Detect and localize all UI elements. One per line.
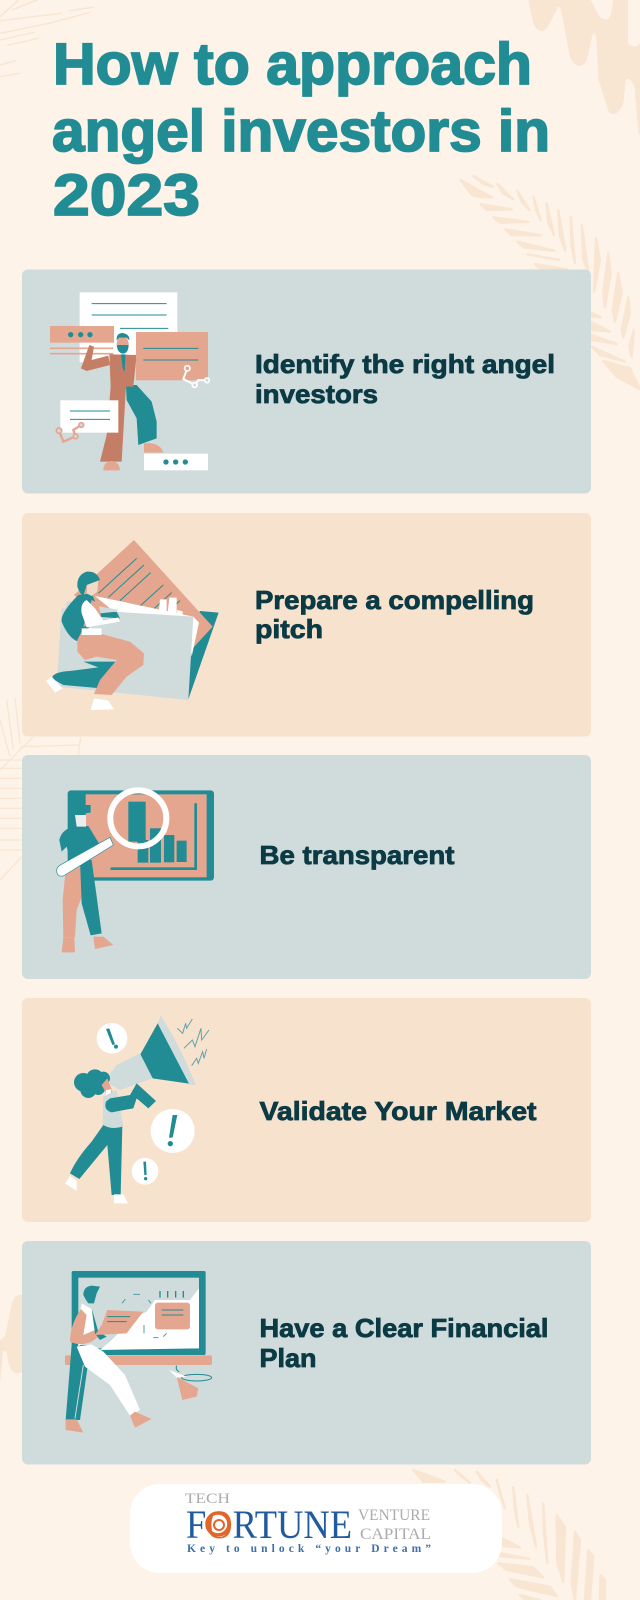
heading: Have a Clear Financial	[260, 1313, 548, 1343]
heading: Plan	[260, 1343, 316, 1373]
illustration: man with calendar board	[65, 1271, 212, 1433]
title: 2023	[53, 163, 200, 228]
logo text: venture capital: VENTURE	[358, 1507, 430, 1524]
heading: Identify the right angel	[255, 349, 555, 379]
heading	[255, 349, 555, 409]
title	[52, 32, 550, 228]
logo text: fortune: FORTUNE	[186, 1502, 352, 1547]
heading: Prepare a compelling	[255, 585, 534, 615]
illustration: woman with megaphone	[65, 1016, 209, 1203]
panel: prepare pitch	[22, 513, 591, 736]
heading: Validate Your Market	[260, 1096, 537, 1126]
illustration: magnifier and bar chart	[57, 790, 214, 952]
illustration: woman with folder	[46, 540, 219, 710]
logo panel	[130, 1484, 502, 1573]
panel: be transparent	[22, 755, 591, 979]
title: angel investors in	[52, 99, 550, 164]
heading: Be transparent	[260, 840, 455, 870]
heading: investors	[255, 379, 378, 409]
panel: identify investors	[22, 270, 591, 494]
title: How to approach	[53, 32, 532, 97]
panel: validate market	[22, 998, 591, 1222]
logo tagline: Key to unlock “your Dream”	[187, 1543, 431, 1555]
heading: pitch	[255, 614, 323, 644]
illustration: man with documents	[50, 292, 209, 470]
heading	[255, 585, 534, 644]
logo text: venture capital	[358, 1507, 431, 1543]
logo text: venture capital: CAPITAL	[360, 1526, 431, 1543]
panel: financial plan	[22, 1241, 591, 1464]
logo icon: spiral	[207, 1513, 229, 1535]
heading	[260, 1313, 548, 1373]
logo text: tech: TECH	[185, 1491, 230, 1507]
